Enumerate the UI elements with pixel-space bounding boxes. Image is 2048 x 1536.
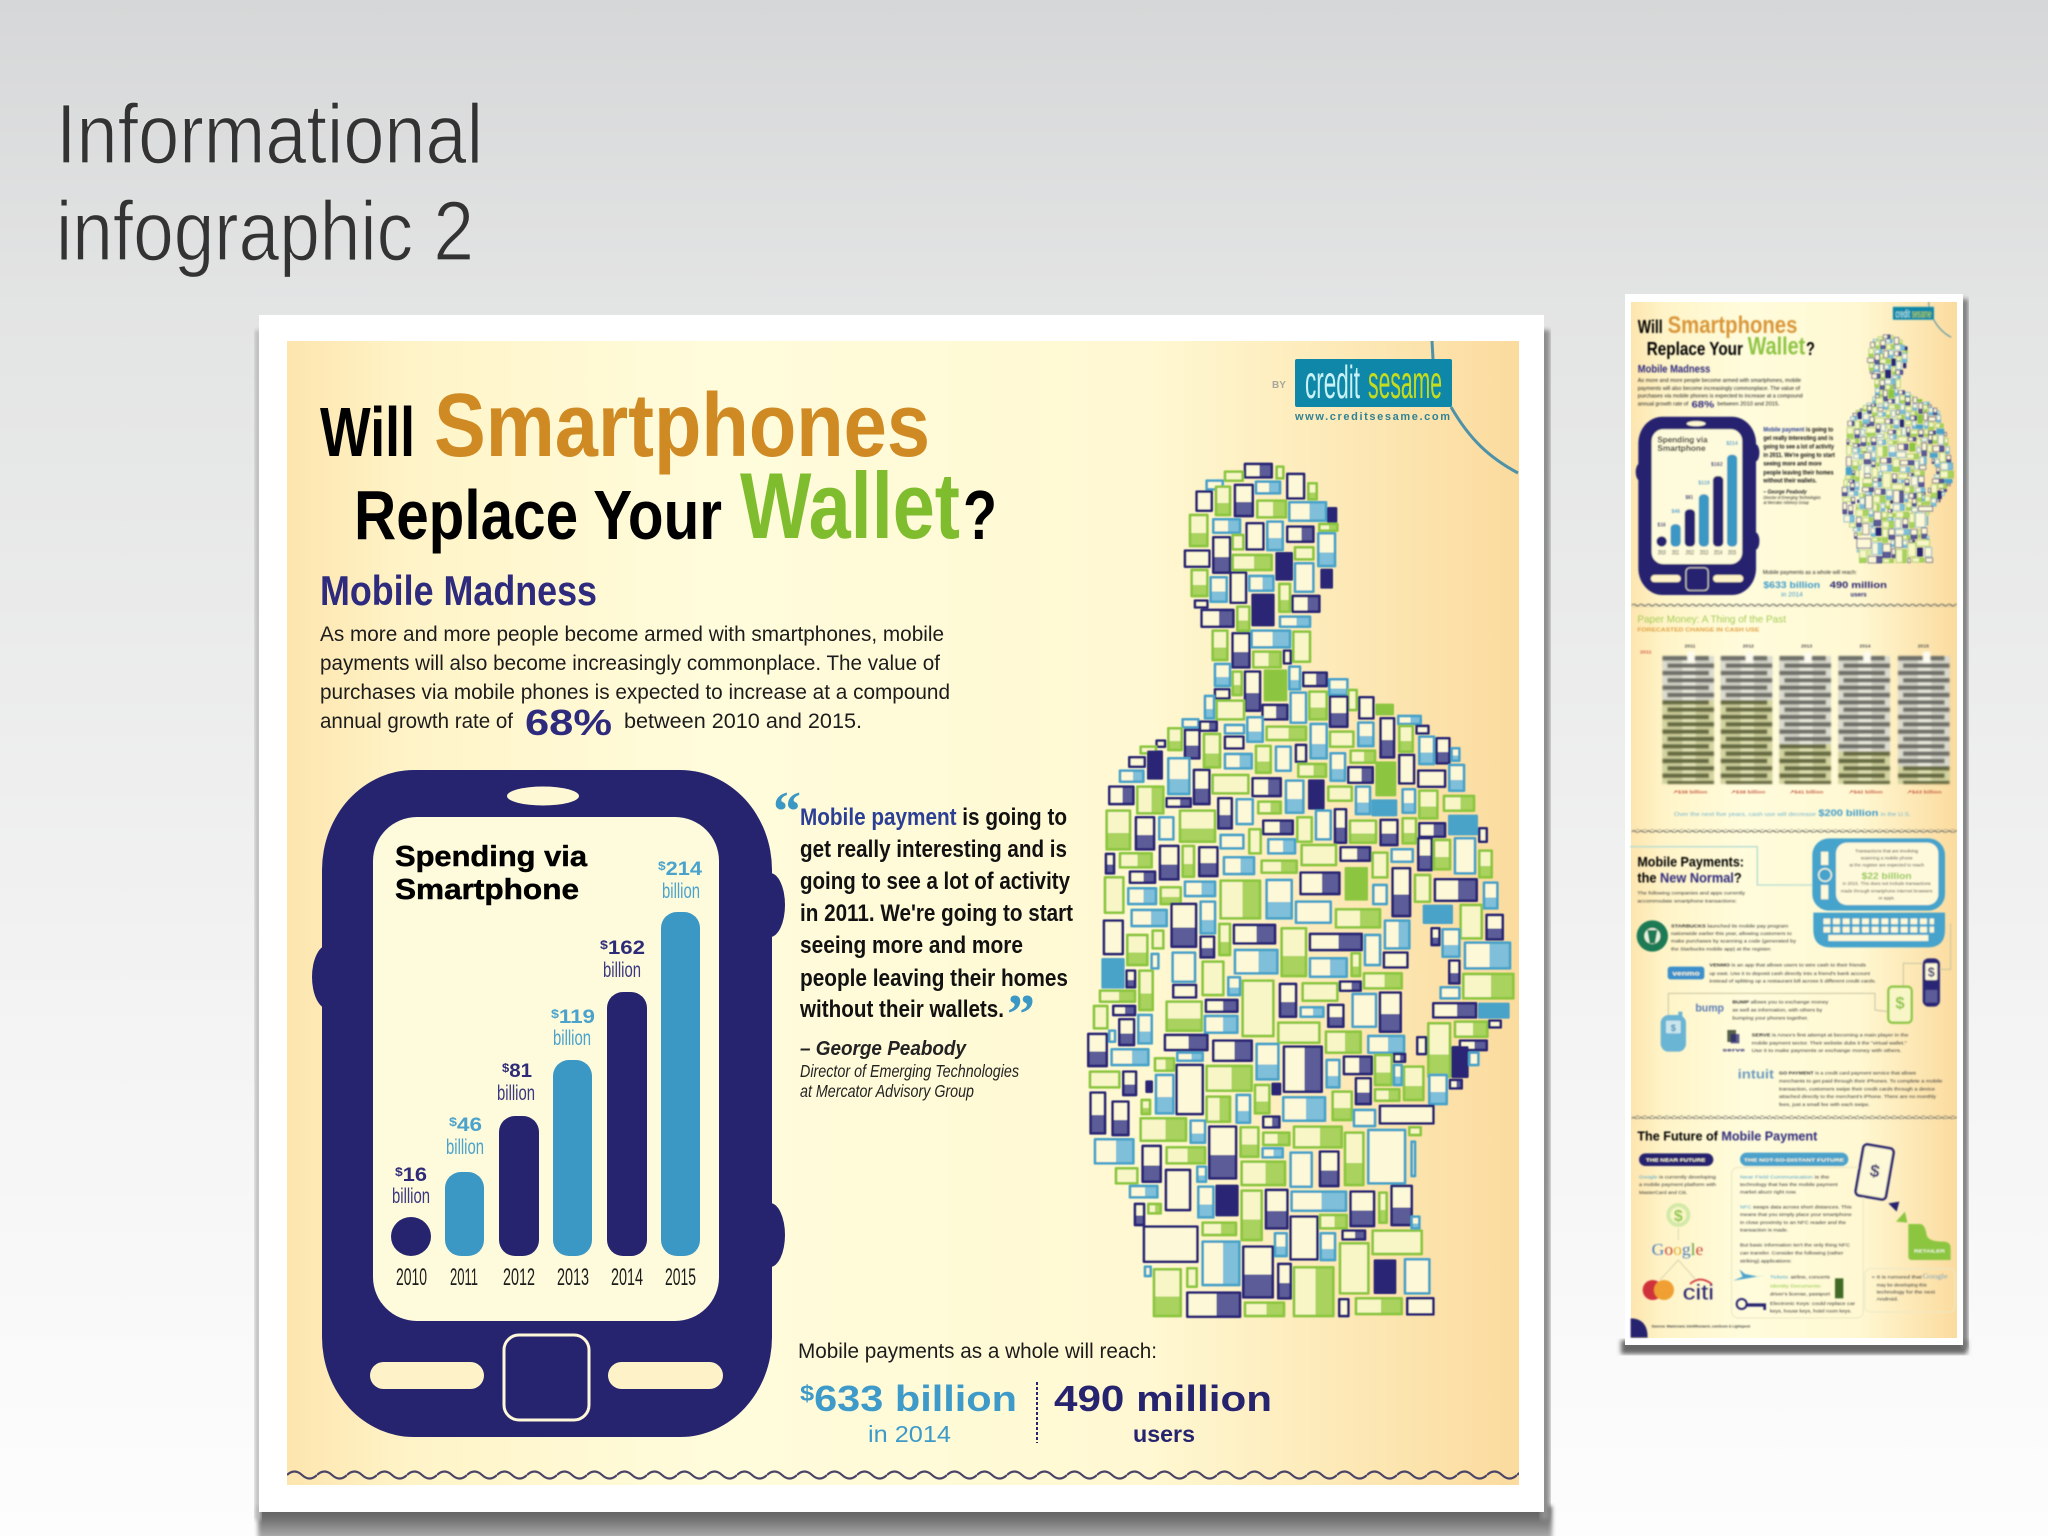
thumbnail section: new normal: Use it to make payments or exchange money with others.	[1752, 1048, 1902, 1053]
connected phones	[1661, 923, 1951, 1052]
logo: credit sesame: BY	[1272, 380, 1286, 391]
near future pill: THE NEAR FUTURE	[1646, 1158, 1706, 1164]
chart year labels: 2011	[450, 1264, 478, 1291]
quote	[773, 781, 1073, 1101]
thumbnail section: new normal: the New Normal?	[1637, 870, 1742, 886]
thumbnail section: new normal: mobile payment sector. Their website dubs it the "virtual wallet."	[1752, 1040, 1907, 1045]
thumbnail section: paper money: FORECASTED CHANGE IN CASH USE	[1637, 628, 1760, 634]
chart unit labels: billion	[662, 880, 700, 903]
chart heading: Spending via	[395, 841, 588, 873]
google payment diagram	[1643, 1203, 1714, 1304]
tablet with dollar sign	[1855, 1144, 1894, 1200]
thumbnail section: top: $46	[1672, 509, 1680, 515]
retailer shape	[1908, 1224, 1951, 1260]
thumbnail section: paper money	[1632, 604, 1957, 818]
intro paragraph: As more and more people become armed with smartphones, mobile	[320, 622, 944, 646]
stat: mobile payments total: Mobile payments as a whole will reach:	[798, 1340, 1157, 1363]
thumbnail section: paper money: 2015	[1918, 643, 1929, 649]
thumbnail section: new normal: $22 billion	[1862, 871, 1912, 881]
chart year labels: 2012	[503, 1264, 535, 1291]
thumbnail section: top: at Mercator Advisory Group	[1763, 500, 1809, 505]
thumbnail section: new normal: nationwide earlier this year, allowing customers to	[1671, 931, 1792, 936]
thumbnail section: top: Spending via	[1657, 434, 1708, 444]
chart value labels: 16	[403, 1165, 427, 1186]
connected phones: $	[1928, 966, 1935, 980]
thumbnail section: top: 2010	[1658, 549, 1666, 556]
title: Replace Your	[354, 476, 722, 554]
chart year labels: 2015	[665, 1264, 696, 1291]
intro paragraph: between 2010 and 2015.	[624, 709, 862, 733]
thumbnail section: top: $214	[1726, 441, 1738, 447]
logo: credit sesame: www.creditsesame.com	[1294, 411, 1450, 423]
thumbnail section: new normal: make purchases by scanning a code (generated by	[1671, 939, 1797, 944]
thumbnail section: future of mobile payment: The Future of Mobile Payment	[1637, 1130, 1818, 1144]
thumbnail section: top: in 2011. We're going to start	[1763, 452, 1836, 459]
connected phones: $	[1895, 993, 1905, 1012]
slide title: infographic 2	[56, 184, 474, 278]
thumbnail section: new normal: intuit	[1738, 1066, 1775, 1081]
thumbnail section: top: 68%	[1691, 399, 1715, 410]
thumbnail section: future of mobile payment: in close proximity to an NFC reader and the	[1740, 1220, 1846, 1225]
thumbnail section: top: annual growth rate of	[1638, 401, 1689, 408]
stat: mobile payments total: $	[800, 1381, 814, 1406]
connected phones: $	[1671, 1023, 1677, 1033]
intro paragraph: payments will also become increasingly commonplace. The value of	[320, 651, 940, 675]
phone mosaic person figure	[1088, 464, 1513, 1317]
chart value labels: 162	[608, 938, 645, 959]
quote: “	[773, 781, 801, 843]
thumbnail section: top: credit	[1895, 308, 1910, 320]
thumbnail section: new normal: in 2015. This does not include transactions	[1843, 881, 1931, 886]
main infographic card	[255, 315, 1552, 1536]
logo: credit sesame	[1272, 341, 1518, 473]
thumbnail section: top: sesame	[1912, 308, 1931, 320]
quote: Mobile payment is going to	[800, 804, 1067, 831]
not so distant future pill: THE NOT-SO-DISTANT FUTURE	[1744, 1158, 1845, 1164]
heading: Mobile Madness: Mobile Madness	[320, 567, 597, 614]
google rumor callout: technology for the next	[1877, 1289, 1936, 1294]
phone body	[312, 770, 785, 1437]
thumbnail section: future of mobile payment: Near Field Communication is the	[1740, 1174, 1830, 1179]
thumbnail section: future of mobile payment: keys, house keys, hotel room keys.	[1770, 1309, 1852, 1314]
thumbnail section: new normal: SERVE is Amex's first attempt at becoming a main player in the	[1752, 1033, 1909, 1038]
corner and sources	[1631, 1318, 1750, 1338]
thumbnail section: new normal: transaction, customers swipe their credit cards through a device	[1779, 1086, 1935, 1091]
thumbnail section: top: between 2010 and 2015.	[1717, 401, 1780, 408]
title: Will	[320, 393, 415, 471]
thumbnail section: top: Mobile payment is going to	[1763, 426, 1833, 433]
thumbnail section: top: in 2014	[1781, 591, 1804, 598]
thumbnail section: new normal: at the register are expected to reach	[1849, 863, 1924, 868]
chart value labels	[395, 859, 702, 1186]
chart value labels: $	[449, 1115, 457, 1129]
thumbnail section: new normal: Transactions that are involving	[1855, 849, 1919, 854]
slide title	[56, 87, 483, 278]
thumbnail section: paper money: 2014	[1859, 643, 1871, 649]
icons: plane, passport, key	[1733, 1269, 1843, 1310]
thumbnail section: paper money: 2011	[1640, 649, 1652, 655]
thumbnail section: new normal: bump	[1695, 1003, 1724, 1015]
intro paragraph	[320, 622, 950, 743]
thumbnail section: paper money: ↗$41 billion	[1789, 789, 1823, 795]
thumbnail section: top: 2014	[1714, 549, 1723, 556]
thumbnail section: top: seeing more and more	[1763, 461, 1822, 468]
chart unit labels	[392, 880, 700, 1208]
serve logo	[1722, 1030, 1745, 1054]
thumbnail section: new normal: the Starbucks mobile app) at the register.	[1671, 947, 1772, 952]
google rumor callout: may be developing this	[1877, 1283, 1927, 1288]
near future pill	[1639, 1153, 1713, 1166]
chart value labels: 214	[666, 859, 702, 880]
thumbnail section: future of mobile payment: Electronic Keys: could replace car	[1770, 1301, 1856, 1306]
google payment diagram: citi	[1683, 1280, 1714, 1304]
thumbnail section: top: Replace Your	[1647, 338, 1743, 359]
thumbnail section: future of mobile payment: NFC swaps data across short distances. This	[1740, 1204, 1852, 1209]
serve logo: serve	[1722, 1048, 1745, 1054]
thumbnail section: paper money: ↗$43 billion	[1907, 789, 1942, 795]
stat: mobile payments total: 490 million	[1054, 1378, 1272, 1419]
title: Wallet	[740, 453, 960, 558]
quote: ”	[1007, 984, 1035, 1046]
thumbnail section: future of mobile payment: transaction is made.	[1740, 1228, 1788, 1233]
thumbnail section: top: $119	[1698, 480, 1710, 486]
thumbnail section: paper money: 2012	[1743, 643, 1754, 649]
thumbnail section: top: without their wallets.	[1763, 478, 1817, 485]
thumbnail section: top: ?	[1806, 338, 1815, 359]
thumbnail section: top: 2013	[1700, 549, 1708, 556]
thumbnail section: future of mobile payment: But basic information isn't the only thing NFC	[1740, 1243, 1851, 1248]
chart unit labels: billion	[392, 1185, 430, 1208]
chart value labels: 46	[457, 1115, 482, 1136]
thumbnail section: new normal: STARBUCKS launched its mobile pay program	[1671, 923, 1788, 928]
chart unit labels: billion	[603, 959, 641, 982]
google payment diagram: Google	[1652, 1240, 1703, 1259]
chart heading: Smartphone	[395, 874, 579, 906]
quote attribution	[800, 1038, 1019, 1101]
chart value labels: 81	[509, 1061, 532, 1082]
thumbnail section: top	[1636, 302, 1953, 598]
venmo badge	[1668, 967, 1704, 979]
logo: credit sesame: credit	[1305, 356, 1360, 408]
thumbnail section: new normal: fees, just a small fee with each swipe.	[1779, 1102, 1870, 1107]
stat: mobile payments total: in 2014	[868, 1421, 951, 1447]
google rumor callout	[1865, 1269, 1955, 1312]
chart heading	[395, 841, 588, 906]
thumbnail section: top: Mobile Madness	[1638, 364, 1710, 376]
thumbnail section: future of mobile payment: striking) applications:	[1740, 1258, 1792, 1263]
thumbnail section: paper money: 2011	[1685, 643, 1696, 649]
chart value labels: $	[600, 938, 608, 952]
thumbnail section: new normal: The following companies and apps currently	[1637, 890, 1746, 896]
thumbnail section: new normal: or apps.	[1878, 895, 1895, 900]
thumbnail section: new normal: VENMO is an app that allows users to wire cash to their friends	[1709, 963, 1867, 968]
thumbnail section: top: Wallet	[1748, 333, 1805, 361]
intro paragraph: 68%	[525, 702, 612, 743]
chart year labels: 2010	[396, 1264, 427, 1291]
thumbnail section: top: – George Peabody	[1763, 489, 1808, 495]
thumbnail section: future of mobile payment: means that you simply place your smartphone	[1740, 1212, 1852, 1217]
quote: seeing more and more	[800, 932, 1023, 959]
title: ?	[963, 476, 997, 554]
thumbnail section: future of mobile payment: MasterCard and Citi.	[1639, 1190, 1687, 1195]
thumbnail section: future of mobile payment: technology that has the mobile payment	[1740, 1182, 1839, 1187]
thumbnail section: top: 2012	[1686, 549, 1694, 556]
chart value labels: $	[551, 1007, 559, 1021]
thumbnail section: top: Director of Emerging Technologies	[1763, 495, 1821, 500]
thumbnail section: top: 2011	[1672, 549, 1679, 556]
chart value labels: $	[502, 1061, 510, 1075]
thumbnail section: top: get really interesting and is	[1763, 435, 1834, 442]
thumbnail section: paper money: Paper Money: A Thing of the Past	[1637, 615, 1786, 626]
quote: people leaving their homes	[800, 965, 1068, 992]
phone chart: Spending via Smartphone	[312, 770, 785, 1437]
quote: in 2011. We're going to start	[800, 900, 1073, 927]
thumbnail section: new normal: up east. Use it to deposit cash directly into a friend's bank account	[1709, 971, 1871, 976]
google rumor callout: Android.	[1877, 1297, 1898, 1302]
thumbnail section: top: Smartphone	[1657, 443, 1706, 453]
google payment diagram: $	[1674, 1208, 1683, 1225]
chart value labels: $	[658, 859, 666, 873]
thumbnail section: top: users	[1850, 591, 1867, 598]
title: Smartphones	[434, 376, 930, 476]
chart year labels	[396, 1264, 696, 1291]
thumbnail section: new normal: accommodate smartphone transactions:	[1637, 899, 1737, 905]
thumbnail section: new normal: BUMP allows you to exchange money	[1732, 999, 1829, 1004]
thumbnail section: top: $81	[1685, 495, 1693, 501]
thumbnail section: top: 490 million	[1830, 580, 1887, 591]
thumbnail section: new normal: as well as information, with others by	[1732, 1007, 1823, 1012]
stat: mobile payments total	[798, 1340, 1272, 1447]
stat: mobile payments total: 633 billion	[814, 1378, 1017, 1419]
thumbnail section: paper money: ↗$38 billion	[1673, 789, 1707, 795]
thumbnail section: paper money: $200 billion	[1818, 808, 1879, 818]
thumbnail section: new normal: attached directly to the merchant's iPhone. There are no monthly	[1779, 1094, 1937, 1099]
thumbnail section: future of mobile payment: market abuzz right now.	[1740, 1189, 1797, 1194]
thumbnail section: paper money: in the U.S.	[1881, 812, 1911, 818]
quote attribution: – George Peabody	[800, 1038, 967, 1060]
thumbnail section: new normal: Mobile Payments:	[1637, 854, 1744, 870]
quote: going to see a lot of activity	[800, 868, 1071, 895]
thumbnail section: paper money: ↗$42 billion	[1848, 789, 1883, 795]
quote: get really interesting and is	[800, 836, 1067, 863]
logo: credit sesame: sesame	[1368, 356, 1442, 408]
blue slider phone	[1812, 838, 1945, 947]
thumbnail section: future of mobile payment: can transfer. Consider the following (rather	[1740, 1250, 1844, 1255]
slide title: Informational	[56, 87, 483, 181]
thumbnail section: new normal	[1630, 829, 1957, 1107]
thumbnail section: paper money: Over the next five years, cash use will decrease	[1674, 812, 1816, 818]
venmo badge: venmo	[1672, 970, 1700, 977]
thumbnail section: future of mobile payment: a mobile payment platform with	[1639, 1182, 1716, 1187]
chart value labels: 119	[559, 1007, 595, 1028]
intro paragraph: purchases via mobile phones is expected to increase at a compound	[320, 680, 950, 704]
thumbnail section: new normal: bumping your phones together.	[1732, 1015, 1808, 1020]
thumbnail section: future of mobile payment: Identity Documents:	[1770, 1284, 1822, 1289]
thumbnail section: top: Will	[1638, 316, 1663, 337]
thumbnail section: top: people leaving their homes	[1763, 469, 1834, 476]
quote attribution: at Mercator Advisory Group	[800, 1081, 974, 1101]
thumbnail section: top: going to see a lot of activity	[1763, 443, 1834, 451]
google rumor callout: » It is rumored that	[1872, 1274, 1923, 1279]
google rumor callout: Google	[1923, 1272, 1948, 1281]
thumbnail section: paper money: ↗$38 billion	[1731, 789, 1765, 795]
thumbnail section: top: Mobile payments as a whole will reach:	[1763, 570, 1857, 576]
thumbnail infographic card	[1621, 294, 1968, 1354]
intro paragraph: annual growth rate of	[320, 709, 513, 733]
title	[320, 376, 997, 558]
thumbnail section: top: $16	[1657, 523, 1666, 529]
thumbnail section: new normal: instead of splitting up a restaurant bill across 5 different credit cards.	[1709, 979, 1876, 984]
thumbnail section: paper money: 2013	[1801, 643, 1812, 649]
thumbnail section: top: purchases via mobile phones is expected to increase at a compound	[1638, 394, 1803, 400]
signal waves	[1888, 1202, 1907, 1223]
chart year labels: 2013	[557, 1264, 589, 1291]
thumbnail section: future of mobile payment: Tickets: airline, concerts	[1770, 1274, 1831, 1279]
stat: mobile payments total: users	[1133, 1421, 1195, 1447]
chart unit labels: billion	[446, 1136, 484, 1159]
tablet with dollar sign: $	[1868, 1160, 1882, 1182]
thumbnail section: future of mobile payment	[1631, 1116, 1957, 1338]
thumbnail section: new normal: GO PAYMENT is a credit card payment service that allows	[1779, 1070, 1917, 1075]
thumbnail section: top: payments will also become increasingly commonplace. The value of	[1638, 386, 1800, 392]
chart value labels: $	[395, 1165, 403, 1179]
thumbnail section: top: $162	[1711, 462, 1723, 468]
quote: without their wallets.	[799, 996, 1004, 1023]
retailer shape: RETAILER	[1914, 1248, 1945, 1254]
thumbnail section: future of mobile payment: driver's license, passport	[1770, 1292, 1831, 1297]
thumbnail section: future of mobile payment: Google is currently developing	[1639, 1174, 1716, 1179]
chart unit labels: billion	[553, 1027, 591, 1050]
chart unit labels: billion	[497, 1082, 535, 1105]
thumbnail section: top: As more and more people become armed with smartphones, mobile	[1638, 378, 1801, 384]
not so distant future pill	[1740, 1153, 1848, 1166]
starbucks logo	[1637, 920, 1668, 952]
thumbnail section: top: 2015	[1728, 549, 1736, 556]
thumbnail section: top: Smartphones	[1668, 312, 1797, 339]
thumbnail section: new normal: made through smartphone internet browsers	[1841, 888, 1933, 893]
bill stacks	[1662, 652, 1950, 784]
corner and sources: Sources: Mastercard, IntelliResearch, comScore & Lightspeed	[1652, 1324, 1750, 1328]
thumbnail section: top: $633 billion	[1763, 580, 1820, 591]
chart year labels: 2014	[611, 1264, 643, 1291]
thumbnail section: new normal: scanning a mobile phone	[1861, 855, 1913, 860]
quote attribution: Director of Emerging Technologies	[800, 1061, 1019, 1081]
thumbnail section: new normal: merchants to get paid through their iPhones. To complete a mobile	[1779, 1078, 1943, 1083]
